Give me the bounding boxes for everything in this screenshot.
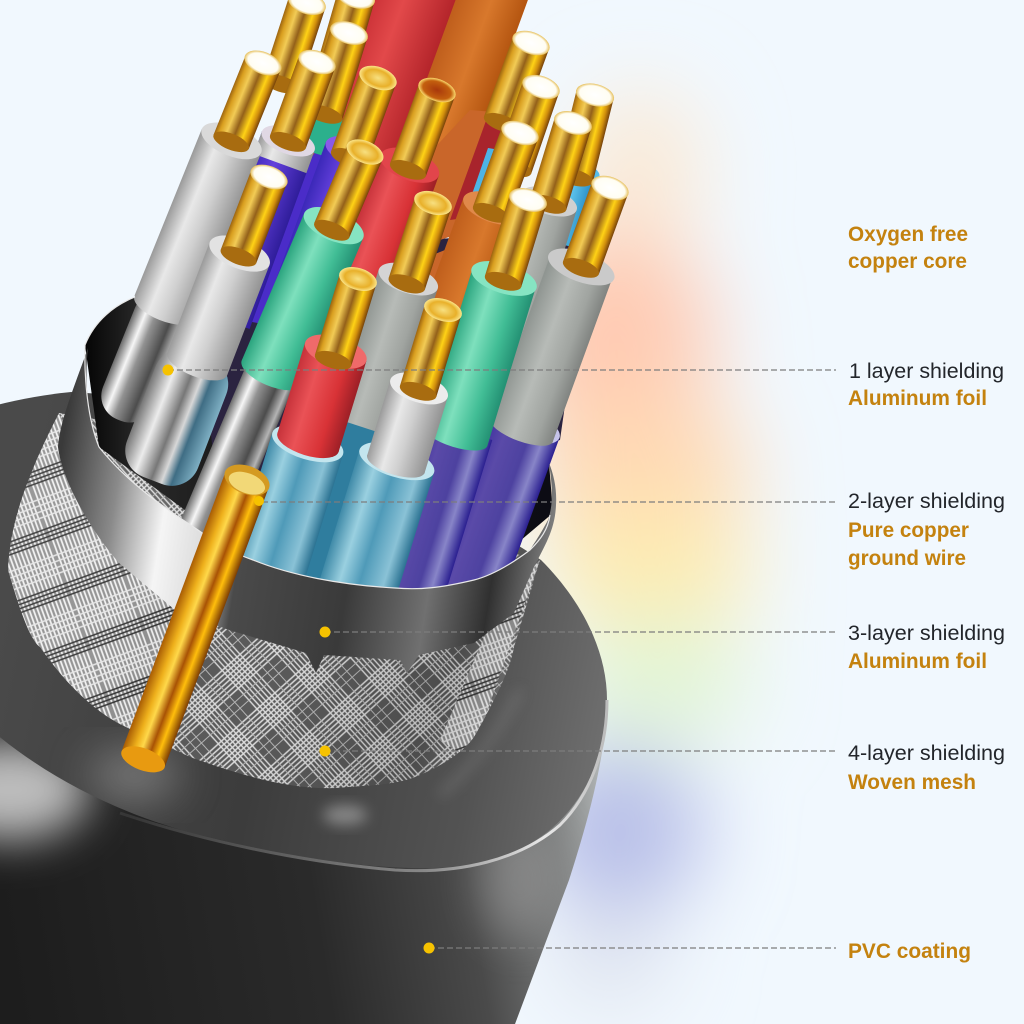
wire: silver foil left — [125, 164, 288, 486]
wire: red — [351, 78, 456, 279]
wire: grey right back — [520, 111, 592, 340]
woven mesh shielding — [8, 413, 540, 788]
PVC cable body — [0, 737, 602, 1024]
label: oxygen free copper core: Oxygen free — [848, 222, 968, 246]
wire: orange — [434, 120, 539, 309]
conductor bundle — [101, 0, 629, 588]
wire: white foil back left — [101, 50, 282, 422]
label: oxygen free copper core: copper core — [848, 249, 967, 273]
wire: large orange — [427, 0, 528, 146]
label: 4-layer shielding: 4-layer shielding — [848, 741, 1005, 765]
label: oxygen free copper core — [848, 222, 968, 273]
label: PVC coating: PVC coating — [848, 939, 971, 963]
wire: grey centre — [348, 190, 452, 431]
wire: white and purple — [246, 50, 336, 329]
filler between wires — [211, 110, 569, 578]
wire: green and purple — [399, 188, 547, 588]
wire: green — [182, 139, 384, 532]
wire: back copper 1 — [270, 0, 326, 94]
wire: large red — [342, 0, 456, 152]
label: 2-layer shielding: 2-layer shielding — [848, 489, 1005, 513]
wire: red and blue — [244, 267, 377, 575]
wire: back right copper on red — [484, 30, 550, 131]
label: 3-layer shielding: 3-layer shielding — [848, 621, 1005, 645]
foil shielding band — [58, 297, 556, 673]
label: 1 layer shielding — [848, 359, 1004, 410]
label: 4-layer shielding: Woven mesh — [848, 770, 976, 794]
jacket end disc — [0, 392, 607, 871]
pure copper ground wire — [117, 459, 274, 778]
wire: grey and purple right — [448, 176, 629, 585]
interior of foil cup — [85, 297, 553, 580]
label: 3-layer shielding — [848, 621, 1005, 673]
callout leader lines — [168, 370, 836, 948]
wire: back copper 3 — [309, 21, 368, 156]
label: 2-layer shielding — [848, 489, 1005, 570]
wire: back copper 2 — [320, 0, 375, 53]
label: 2-layer shielding: Pure copper — [848, 518, 970, 542]
label: 3-layer shielding: Aluminum foil — [848, 649, 987, 673]
wire: purple — [276, 66, 397, 279]
label: 4-layer shielding — [848, 741, 1005, 794]
wire: sky blue — [566, 83, 614, 246]
label: 1 layer shielding: Aluminum foil — [848, 386, 987, 410]
label: 2-layer shielding: ground wire — [848, 546, 966, 570]
wire: back right copper — [510, 74, 560, 178]
callout dots — [162, 364, 434, 954]
wire: silver and blue — [320, 298, 462, 588]
label: 1 layer shielding: 1 layer shielding — [849, 359, 1004, 383]
